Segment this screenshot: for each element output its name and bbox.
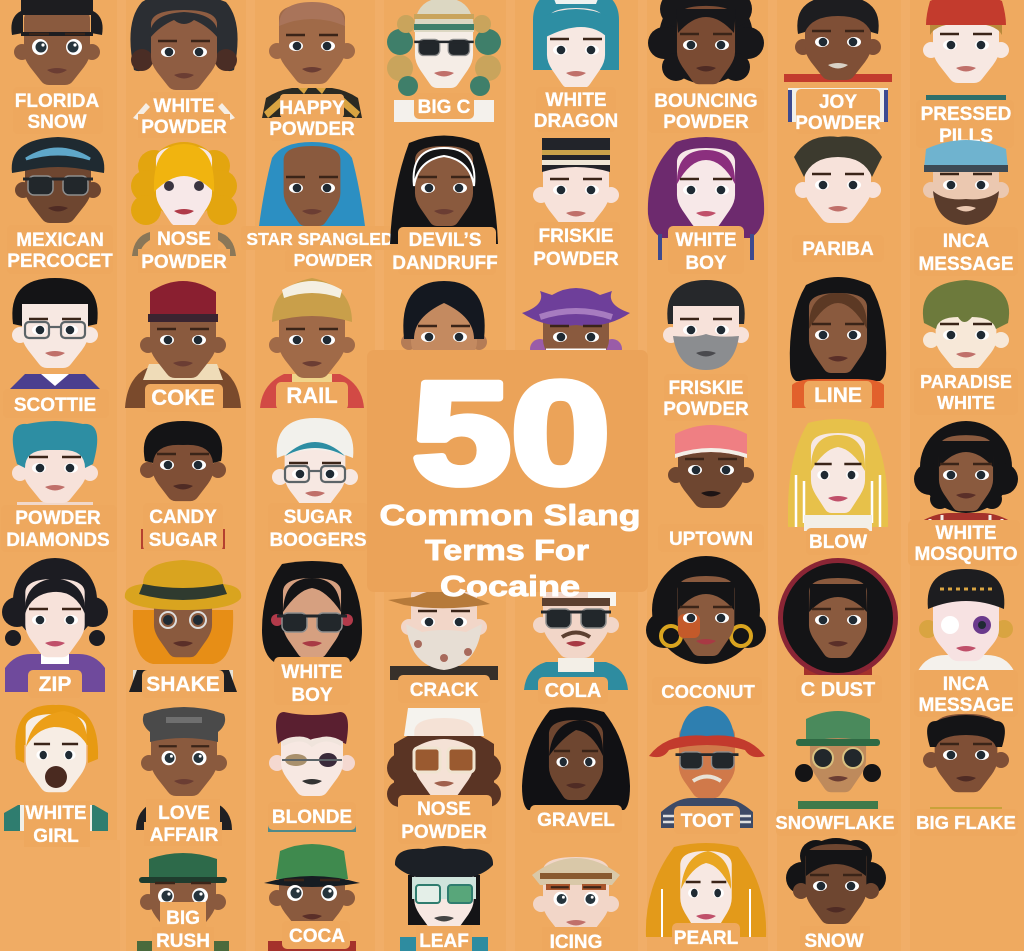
label: Pressed Pills: PRESSED xyxy=(921,104,1011,125)
label: Star Spangled Powder: POWDER xyxy=(294,250,373,270)
label: White Dragon: DRAGON xyxy=(534,111,618,132)
avatar: Powder Diamonds xyxy=(1,421,117,552)
label: Big Rush xyxy=(152,902,214,951)
label: Joy Powder xyxy=(795,89,881,134)
label: Toot: TOOT xyxy=(681,811,734,832)
label: Paradise White: PARADISE xyxy=(920,372,1012,392)
avatar: Love Affair xyxy=(136,707,232,846)
label: Star Spangled Powder xyxy=(241,226,399,272)
avatar: Gravel xyxy=(522,707,630,833)
avatar: Line xyxy=(790,277,886,409)
label: Mexican Percocet: MEXICAN xyxy=(16,230,104,251)
label: Devil's Dandruff: DANDRUFF xyxy=(392,253,498,274)
label: Friskie Powder xyxy=(663,374,749,421)
avatar: Coca xyxy=(264,844,360,951)
avatar: White Dragon xyxy=(533,0,619,132)
avatar: White Mosquito xyxy=(908,421,1020,566)
avatar: Snow xyxy=(786,838,886,951)
avatar: Devil's Dandruff xyxy=(390,136,498,275)
avatar: Big Rush xyxy=(137,853,229,951)
label: Cola: COLA xyxy=(545,680,601,702)
label: Pressed Pills: PILLS xyxy=(939,126,993,147)
avatar: C Dust xyxy=(778,558,898,703)
label: Blow: BLOW xyxy=(809,532,867,553)
avatar: Joy Powder xyxy=(784,0,892,134)
avatar: Shake xyxy=(125,560,241,698)
avatar: Nose Powder (gold curls) xyxy=(131,142,237,273)
label: Inca Message: INCA xyxy=(943,231,989,252)
avatar: Star Spangled Powder xyxy=(241,142,399,272)
label: Rail: RAIL xyxy=(286,383,338,408)
label: C Dust: C DUST xyxy=(801,679,875,701)
label: White Girl: WHITE xyxy=(25,803,87,824)
label: Big C: BIG C xyxy=(418,97,471,118)
label: Coca: COCA xyxy=(289,926,345,947)
avatar: Paradise White xyxy=(914,280,1018,415)
label: White Mosquito xyxy=(908,520,1020,566)
label: Mexican Percocet: PERCOCET xyxy=(7,251,113,272)
label: White Boy xyxy=(668,226,744,274)
label: Coconut: COCONUT xyxy=(661,681,755,702)
label: Powder Diamonds xyxy=(1,505,117,552)
label: Paradise White: WHITE xyxy=(937,393,995,413)
title line 1: Common Slang xyxy=(380,500,640,532)
label: Nose Powder xyxy=(398,795,492,844)
label: Zip: ZIP xyxy=(39,673,71,696)
avatar: Nose Powder (white hat) xyxy=(387,708,501,844)
label: White Boy: BOY xyxy=(291,685,333,706)
label: Powder Diamonds: DIAMONDS xyxy=(6,530,110,551)
label: Candy Sugar xyxy=(143,503,223,551)
label: Inca Message: MESSAGE xyxy=(918,254,1014,275)
label: Devil's Dandruff xyxy=(392,227,498,275)
avatar: Rail xyxy=(260,278,364,410)
label: Nose Powder: NOSE xyxy=(157,229,211,250)
label: White Mosquito: MOSQUITO xyxy=(914,544,1018,565)
label: Friskie Powder: FRISKIE xyxy=(539,226,613,247)
label: Pariba: PARIBA xyxy=(802,239,874,260)
label: Friskie Powder: POWDER xyxy=(663,399,749,420)
label: White Boy xyxy=(274,657,350,706)
label: Pearl: PEARL xyxy=(674,928,739,949)
label: White Powder xyxy=(133,92,235,138)
avatar: Friskie Powder xyxy=(533,138,620,270)
label: Bouncing Powder: BOUNCING xyxy=(654,91,758,112)
avatar: Crack xyxy=(388,582,498,703)
label: Blonde: BLONDE xyxy=(272,807,352,828)
avatar: Pariba xyxy=(792,136,884,262)
avatar: Leaf xyxy=(395,846,493,951)
label: White Girl: GIRL xyxy=(33,826,79,847)
label: Nose Powder: POWDER xyxy=(401,822,487,843)
avatar: White Boy (purple hair) xyxy=(648,137,764,274)
label: Happy Powder xyxy=(269,94,355,141)
avatar: Snowflake xyxy=(775,711,898,836)
label: Florida Snow: FLORIDA xyxy=(15,91,99,112)
title number: 50: 50 xyxy=(412,352,610,514)
label: Happy Powder: POWDER xyxy=(269,119,355,140)
avatar: Scottie xyxy=(3,278,109,418)
title line 2: Terms For xyxy=(425,535,589,567)
avatar: Friskie Powder (grey beard) xyxy=(663,280,749,421)
label: White Powder: WHITE xyxy=(153,96,215,117)
avatar: Happy Powder xyxy=(262,2,362,141)
label: Sugar Boogers: SUGAR xyxy=(284,507,353,528)
label: Happy Powder: HAPPY xyxy=(279,98,345,119)
avatar: Inca Message (beads) xyxy=(914,569,1018,717)
avatar: Florida Snow xyxy=(11,0,103,134)
label: Nose Powder xyxy=(138,225,230,273)
label: Inca Message: INCA xyxy=(943,674,989,695)
avatar: Icing xyxy=(532,857,620,951)
label: Friskie Powder xyxy=(533,222,620,270)
label: Candy Sugar: SUGAR xyxy=(149,530,218,551)
label: Scottie: SCOTTIE xyxy=(14,395,96,416)
label: Coconut xyxy=(652,677,762,705)
avatar: Blonde xyxy=(268,712,356,832)
label: Joy Powder: JOY xyxy=(819,92,857,113)
label: Nose Powder: NOSE xyxy=(417,799,471,820)
label: Love Affair: LOVE xyxy=(158,803,210,824)
label: Coke: COKE xyxy=(151,385,215,410)
label: Sugar Boogers xyxy=(268,503,368,551)
avatar: Sugar Boogers xyxy=(268,418,368,551)
label: Shake: SHAKE xyxy=(146,673,220,696)
label: White Dragon xyxy=(534,87,618,132)
label: Love Affair: AFFAIR xyxy=(150,825,219,846)
label: Inca Message xyxy=(914,670,1018,717)
label: Big Flake: BIG FLAKE xyxy=(916,812,1016,833)
label: Gravel: GRAVEL xyxy=(537,810,615,831)
avatar: hidden face behind title (black hair) xyxy=(401,281,487,375)
label: Inca Message xyxy=(914,227,1018,276)
avatar: Cola xyxy=(524,578,628,704)
label: Nose Powder: POWDER xyxy=(141,252,227,273)
avatar: Mexican Percocet xyxy=(7,137,113,274)
avatar: Candy Sugar xyxy=(140,421,226,551)
label: White Powder: POWDER xyxy=(141,117,227,138)
label: Friskie Powder: POWDER xyxy=(533,249,619,270)
avatar: Inca Message xyxy=(914,140,1018,276)
label: White Mosquito: WHITE xyxy=(935,523,997,544)
label: Paradise White xyxy=(914,368,1018,415)
label: Line: LINE xyxy=(814,384,862,407)
label: Florida Snow: SNOW xyxy=(27,112,87,133)
label: Powder Diamonds: POWDER xyxy=(15,508,101,529)
avatar: Uptown xyxy=(658,425,764,552)
label: Bouncing Powder: POWDER xyxy=(663,112,749,133)
label: Candy Sugar: CANDY xyxy=(149,507,217,528)
label: White Girl xyxy=(24,801,90,847)
avatar: Coke xyxy=(125,281,241,412)
label: White Boy: BOY xyxy=(685,253,727,274)
label: Bouncing Powder xyxy=(648,88,764,133)
avatar: Blow xyxy=(788,419,888,555)
label: Big Rush: BIG xyxy=(166,908,200,929)
label: White Dragon: WHITE xyxy=(545,90,607,111)
title panel xyxy=(367,350,648,603)
label: Star Spangled Powder: STAR SPANGLED xyxy=(246,229,394,249)
avatar: White Powder xyxy=(130,0,238,138)
label: White Boy: WHITE xyxy=(281,662,343,683)
label: Uptown: UPTOWN xyxy=(669,529,753,550)
avatar: Coconut xyxy=(646,556,766,705)
label: White Boy: WHITE xyxy=(675,230,737,251)
avatar: Big C xyxy=(387,0,501,122)
label: C Dust xyxy=(796,675,882,703)
avatar: hidden face behind title (purple hat) xyxy=(522,288,630,373)
label: Sugar Boogers: BOOGERS xyxy=(269,530,367,551)
avatar: White Boy (sunglasses) xyxy=(262,561,362,706)
avatar: Pearl xyxy=(646,843,766,951)
avatar: Toot xyxy=(649,706,765,834)
avatar: Pressed Pills xyxy=(916,0,1014,148)
label: Mexican Percocet xyxy=(7,225,113,274)
label: Inca Message: MESSAGE xyxy=(918,695,1014,716)
avatar: Bouncing Powder xyxy=(648,0,764,133)
label: Friskie Powder: FRISKIE xyxy=(669,378,743,399)
label: Snowflake: SNOWFLAKE xyxy=(775,812,895,833)
label: Love Affair xyxy=(144,799,222,846)
label: Pressed Pills xyxy=(916,100,1014,148)
label: Florida Snow xyxy=(13,87,103,134)
avatar: White Girl xyxy=(4,705,108,847)
label: Joy Powder: POWDER xyxy=(795,113,881,134)
label: Crack: CRACK xyxy=(410,680,479,701)
avatar: Zip xyxy=(2,558,108,698)
label: Devil's Dandruff: DEVIL’S xyxy=(409,230,481,251)
avatar: Big Flake xyxy=(914,714,1018,836)
title line 3: Cocaine xyxy=(440,571,580,603)
